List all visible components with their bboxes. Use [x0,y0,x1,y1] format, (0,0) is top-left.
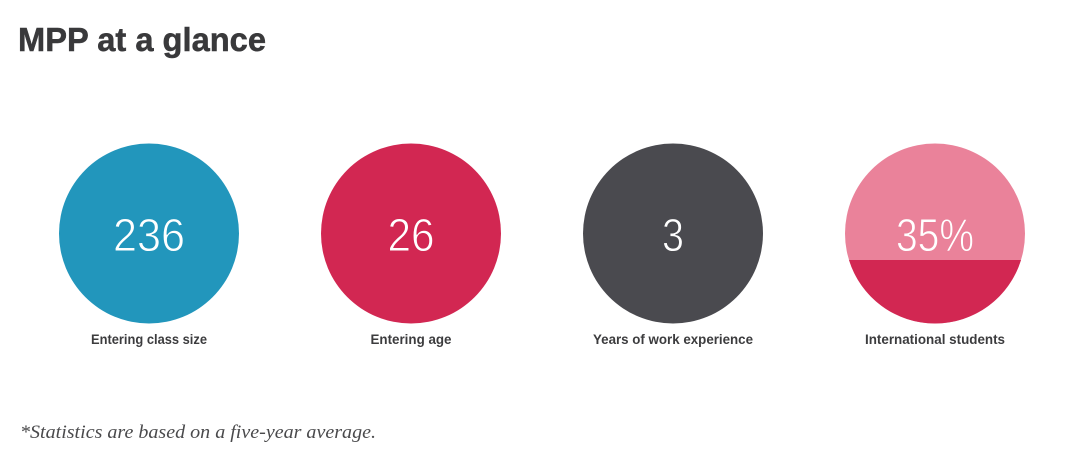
circle: blue [59,144,239,324]
stat: international students [845,144,1025,347]
footnote: *Statistics are based on a five-year average. [20,422,376,443]
label: entering class size: Entering class size [91,332,207,347]
circle segment: red 35 percent fill [849,260,1021,323]
circle: pink base [845,144,1025,324]
number: 35%: 35% [896,209,974,261]
stat: years of work experience [583,144,763,347]
circle: dark grey [583,144,763,324]
number: 26: 26 [388,209,434,261]
label: international students: International students [865,332,1005,347]
stat: entering age [321,144,501,347]
stat: entering class size [59,144,239,347]
number: 3: 3 [662,209,684,261]
number: 236: 236 [113,209,185,261]
label: entering age: Entering age [370,332,452,347]
label: years of work experience: Years of work experience [593,332,753,347]
title: MPP at a glance [18,21,266,58]
circle: red [321,144,501,324]
